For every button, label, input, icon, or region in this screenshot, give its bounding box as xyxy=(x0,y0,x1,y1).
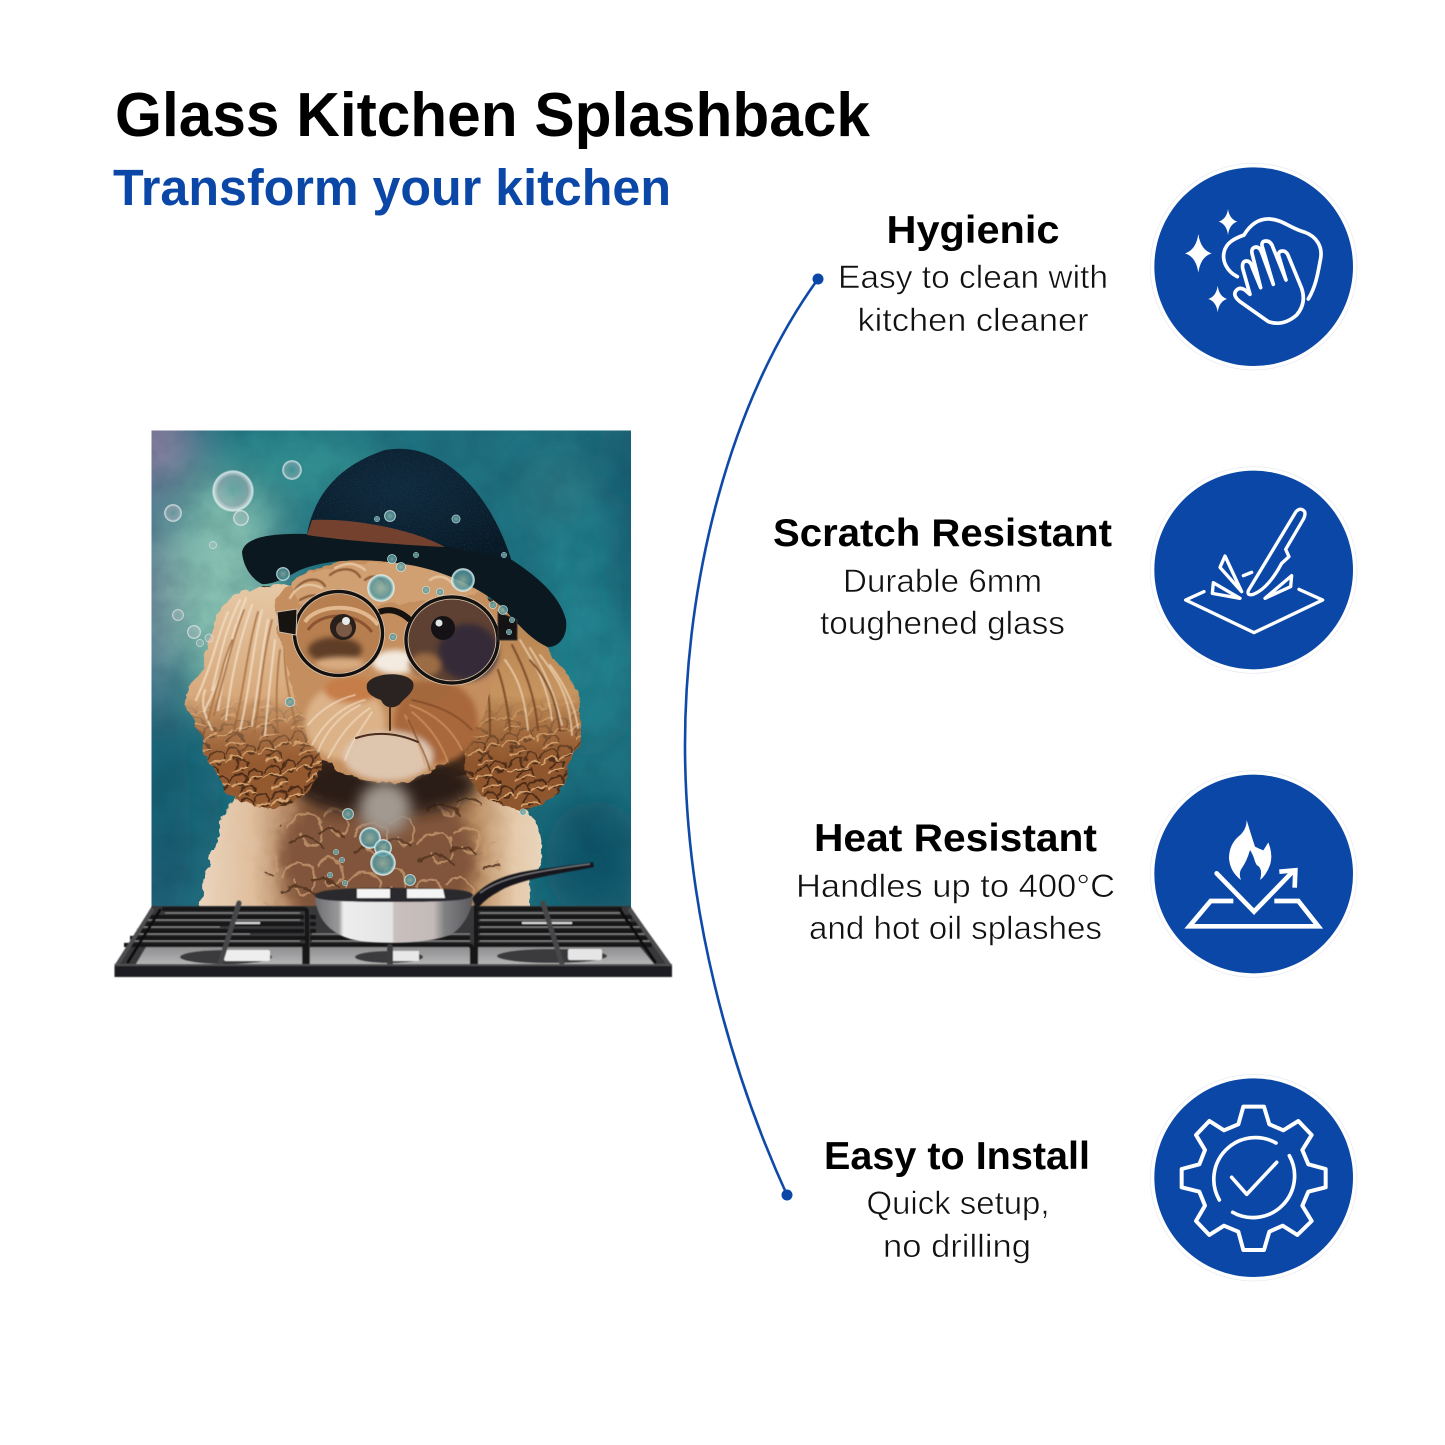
icon: flame on heat-resistant surface xyxy=(1150,771,1357,977)
chest tuft xyxy=(293,755,477,834)
description xyxy=(796,868,1115,946)
grate bars xyxy=(124,905,652,965)
head xyxy=(275,557,500,782)
feature: Easy to Install xyxy=(824,1135,1090,1264)
description xyxy=(838,259,1108,338)
forehead curls xyxy=(290,564,454,600)
feature: Hygienic xyxy=(838,209,1108,338)
panel: dog artwork xyxy=(152,430,631,909)
heading: Heat Resistant xyxy=(814,817,1097,860)
description: Durable 6mm xyxy=(843,563,1042,599)
product image: splashback with dog artwork above gas hob xyxy=(114,385,672,977)
description xyxy=(820,563,1065,641)
description: toughened glass xyxy=(820,605,1065,641)
mouth line xyxy=(356,708,418,742)
title: Glass Kitchen Splashback xyxy=(115,81,870,150)
left ear xyxy=(185,584,324,807)
description: Handles up to 400°C xyxy=(796,868,1115,904)
description: Quick setup, xyxy=(866,1185,1050,1221)
frying pan xyxy=(315,862,594,943)
glasses xyxy=(277,592,517,683)
dog body xyxy=(198,774,542,907)
nose xyxy=(367,674,413,707)
feature: Scratch Resistant xyxy=(773,512,1112,641)
subtitle: Transform your kitchen xyxy=(113,159,671,216)
grate glints xyxy=(132,913,650,941)
muzzle strands xyxy=(308,695,472,770)
description: no drilling xyxy=(883,1228,1031,1264)
left ear strands xyxy=(196,598,310,735)
icon: knife scratching glass xyxy=(1150,467,1357,673)
hat xyxy=(242,449,566,647)
feature: Heat Resistant xyxy=(796,817,1115,946)
burner trays xyxy=(136,947,654,964)
connector curve with end dots xyxy=(685,274,824,1200)
hob front edge xyxy=(114,964,672,977)
description xyxy=(866,1185,1050,1264)
heading: Hygienic xyxy=(886,209,1060,252)
description: Easy to clean with xyxy=(838,259,1108,295)
description: and hot oil splashes xyxy=(809,910,1102,946)
icon: gear with check mark xyxy=(1150,1074,1357,1281)
gas hob xyxy=(114,903,672,977)
right ear xyxy=(466,598,583,810)
right ear strands xyxy=(488,640,578,735)
lens interiors and eyes xyxy=(296,592,498,682)
description: kitchen cleaner xyxy=(858,302,1089,338)
bubbles xyxy=(164,460,526,886)
burners xyxy=(180,923,607,964)
heading: Easy to Install xyxy=(824,1135,1090,1178)
icon: hand wiping with sparkles xyxy=(1150,163,1357,370)
fur backing xyxy=(262,586,505,784)
heading: Scratch Resistant xyxy=(773,512,1112,555)
muzzle xyxy=(305,650,478,781)
cross bars and side rails xyxy=(117,903,670,966)
